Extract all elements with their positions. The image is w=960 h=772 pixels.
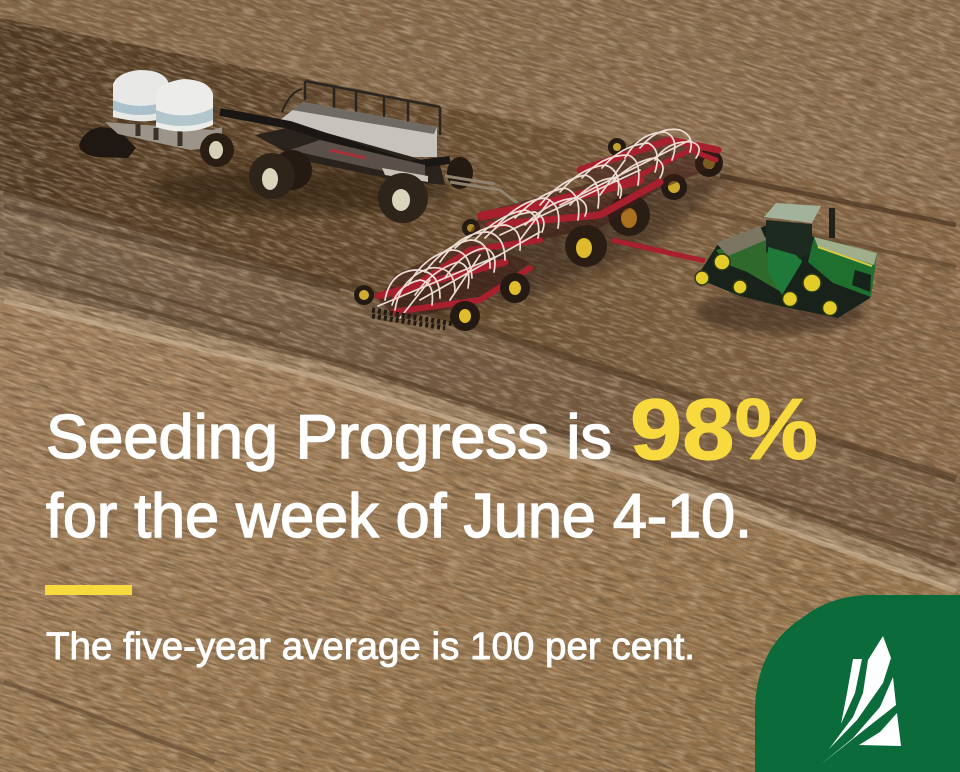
yellow track wheels (695, 254, 838, 316)
seeder front wheels (354, 225, 607, 331)
cab (764, 203, 821, 295)
heading line 2: for the week of June 4-10. (46, 482, 752, 551)
seeder openers (372, 310, 460, 328)
main grain tank with railing (220, 81, 450, 185)
yellow accent bar (45, 585, 132, 595)
cart front wheel (200, 133, 234, 167)
hitch hoses to cart (445, 176, 520, 205)
tractor base silhouette (696, 224, 876, 318)
tank frame (105, 122, 222, 150)
highlighted percentage: 98% (630, 382, 818, 478)
drawbar to tractor (612, 240, 705, 261)
air cart large wheels (249, 150, 473, 223)
green four-track tractor (695, 203, 877, 334)
seeder frame underlay (378, 133, 720, 320)
white hoses (378, 129, 699, 318)
air seeder with red frame and white hoses (354, 129, 740, 331)
heading line 1 (46, 382, 818, 478)
five-year average note: The five-year average is 100 per cent. (46, 626, 695, 668)
rear tracked wheel (79, 127, 136, 158)
air cart with tanks (79, 70, 473, 223)
hood (808, 237, 877, 297)
back wheels of seeder (462, 138, 723, 237)
logo: wheat sheaf (820, 636, 901, 765)
heading line 1: Seeding Progress is (46, 403, 612, 472)
red frame (378, 140, 718, 312)
tractor rear body (716, 236, 802, 292)
logo badge (755, 595, 960, 772)
exhaust stack (829, 208, 835, 238)
white fertilizer tanks (113, 70, 213, 132)
